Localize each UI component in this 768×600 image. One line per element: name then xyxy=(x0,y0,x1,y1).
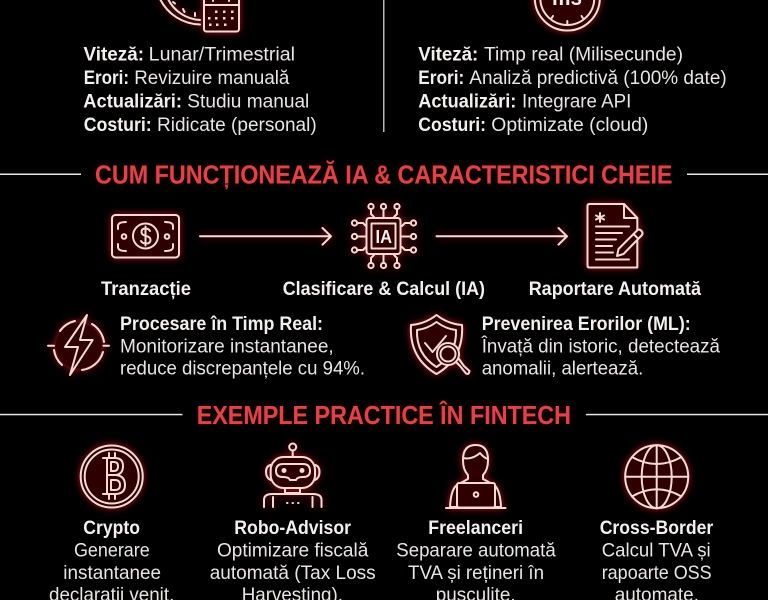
example: freelancers: Separare automată xyxy=(396,540,556,562)
comparison list: AI: Erori: xyxy=(418,67,464,89)
comparison list: AI: Costuri: xyxy=(418,114,486,136)
step labels: Raportare Automată xyxy=(529,278,701,300)
comparison list: AI: Optimizate (cloud) xyxy=(491,114,648,136)
feature: real-time processing xyxy=(120,313,365,380)
comparison list: traditional: Revizuire manuală xyxy=(134,67,289,89)
heading: fintech examples: EXEMPLE PRACTICE ÎN FINTECH xyxy=(197,400,571,430)
icon: automated report document xyxy=(588,204,642,268)
example: robo-advisor: Optimizare fiscală xyxy=(217,540,368,562)
icon: shield with magnifier xyxy=(411,315,470,374)
icon: lightning bolt xyxy=(48,315,109,375)
heading: how AI works: CUM FUNCȚIONEAZĂ IA & CARACTERISTICI CHEIE xyxy=(95,160,672,190)
step labels xyxy=(101,278,701,300)
arrow: transaction to classification xyxy=(200,228,331,245)
comparison list: traditional: Viteză: xyxy=(84,44,144,66)
example: robo-advisor xyxy=(210,517,376,600)
comparison list: traditional: Ridicate (personal) xyxy=(157,114,317,136)
icon: millisecond stopwatch xyxy=(535,0,600,30)
icon: globe xyxy=(625,445,688,508)
feature: error prevention: Prevenirea Erorilor (ML): xyxy=(482,313,691,335)
icon: AI chip xyxy=(352,204,416,268)
icon: robot xyxy=(264,444,322,507)
feature: error prevention: Învață din istoric, detectează xyxy=(481,334,720,358)
example: robo-advisor: automată (Tax Loss xyxy=(210,562,376,584)
example: freelancers: Freelanceri xyxy=(428,517,523,539)
feature: real-time processing: Monitorizare instantanee, xyxy=(120,336,334,358)
icon: transaction banknote xyxy=(112,215,179,258)
example: crypto: Crypto xyxy=(83,517,140,539)
example: crypto xyxy=(49,517,174,600)
feature: real-time processing: Procesare în Timp Real: xyxy=(120,313,323,335)
feature: error prevention: anomalii, alertează. xyxy=(482,358,643,380)
comparison list: traditional xyxy=(83,44,317,136)
icon: clock and calendar xyxy=(160,0,239,32)
example: cross-border: Cross-Border xyxy=(600,517,714,539)
example: freelancers xyxy=(396,517,556,600)
example: freelancers: TVA și rețineri în xyxy=(408,562,544,584)
step labels: Tranzacție xyxy=(101,278,191,300)
icon: AI chip: IA xyxy=(376,227,392,247)
example: cross-border: Calcul TVA și xyxy=(602,540,711,562)
comparison list: traditional: Lunar/Trimestrial xyxy=(149,44,295,66)
vertical divider xyxy=(383,0,384,132)
comparison list: AI: Timp real (Milisecunde) xyxy=(484,44,683,66)
comparison list: traditional: Studiu manual xyxy=(187,90,309,112)
example: robo-advisor: Robo-Advisor xyxy=(234,517,351,539)
comparison list: AI: Viteză: xyxy=(418,44,478,66)
icon: bitcoin coin xyxy=(81,446,143,508)
comparison list: traditional: Costuri: xyxy=(84,114,152,136)
arrow: classification to reporting xyxy=(436,228,567,245)
example: cross-border xyxy=(600,517,714,600)
feature: real-time processing: reduce discrepanțele cu 94%. xyxy=(120,358,365,380)
comparison list: AI: Actualizări: xyxy=(418,90,516,112)
comparison list: traditional: Erori: xyxy=(84,67,129,89)
example: cross-border: rapoarte OSS xyxy=(602,562,712,584)
comparison list: AI xyxy=(418,44,727,136)
feature: error prevention xyxy=(481,313,720,380)
comparison list: AI: Analiză predictivă (100% date) xyxy=(469,67,727,89)
comparison list: traditional: Actualizări: xyxy=(83,90,182,112)
example: crypto: instantanee xyxy=(63,562,161,584)
step labels: Clasificare & Calcul (IA) xyxy=(283,278,485,300)
comparison list: AI: Integrare API xyxy=(522,90,631,112)
icon: freelancer at laptop xyxy=(446,445,506,508)
example: crypto: Generare xyxy=(74,540,150,562)
